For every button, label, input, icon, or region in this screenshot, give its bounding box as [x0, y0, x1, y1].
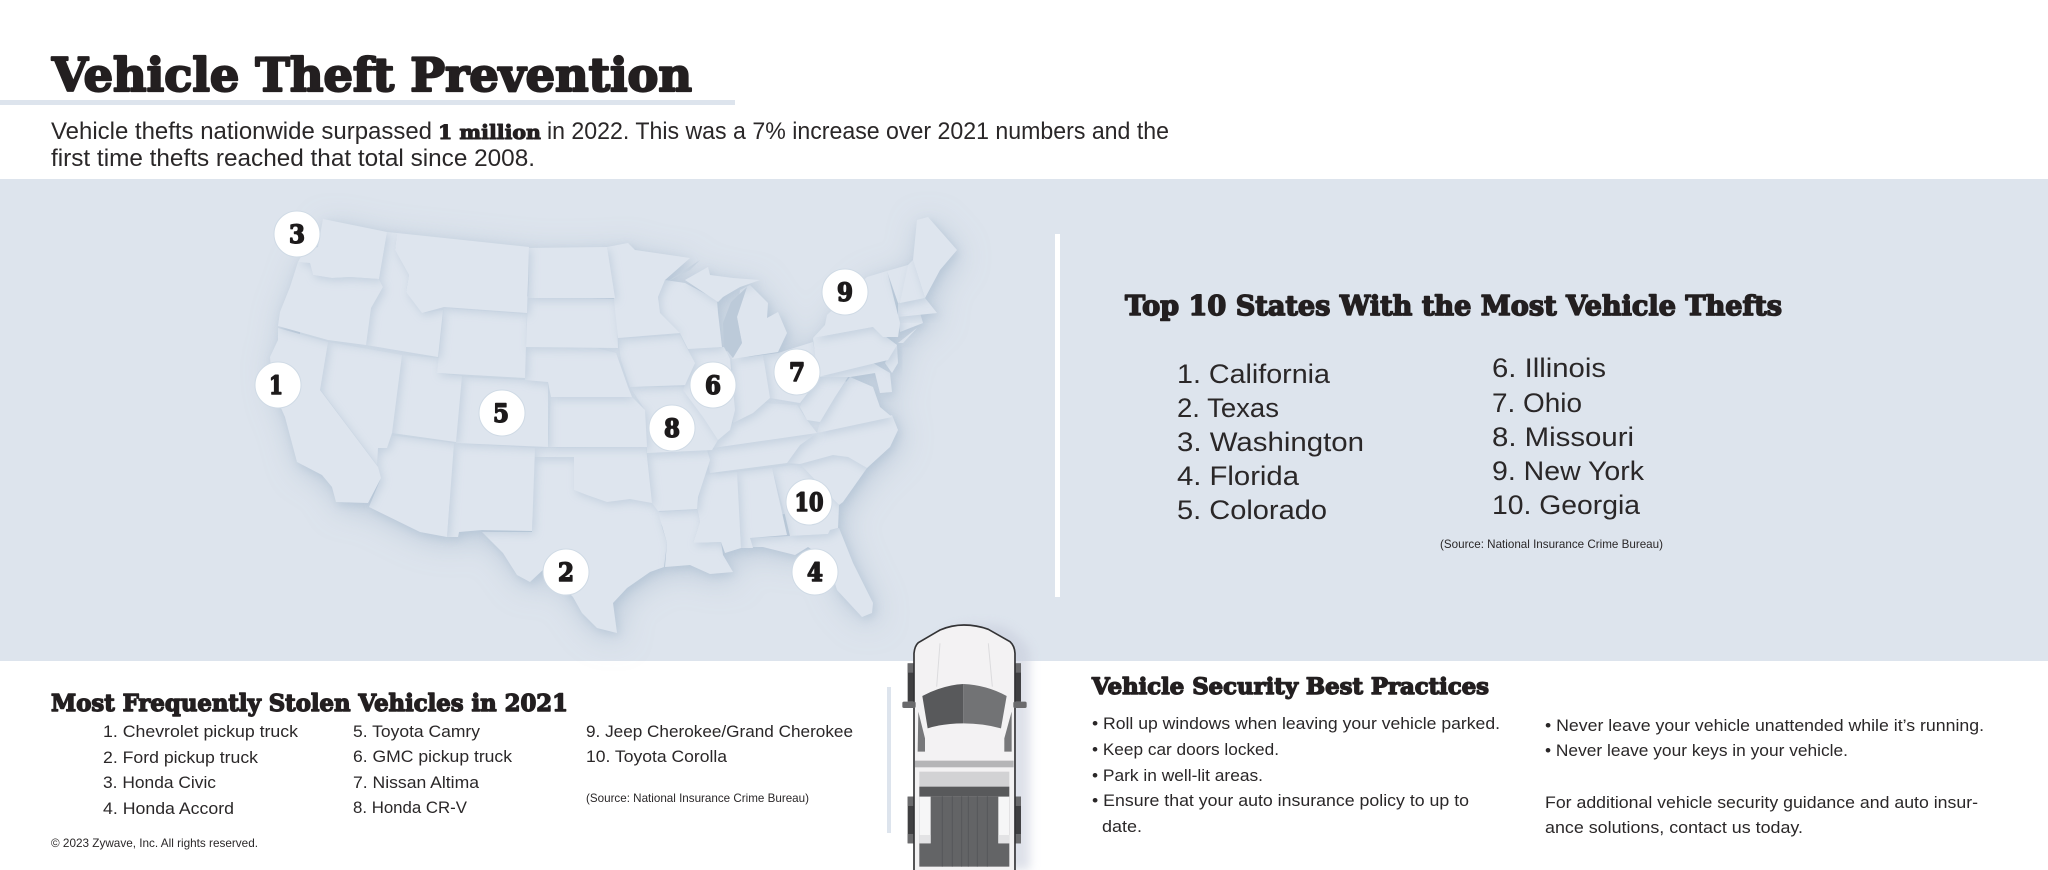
list: states 1 to 5: 4. Florida: [1177, 461, 1300, 491]
marker 8 Missouri: 8: [664, 414, 680, 443]
panel: map background band: [0, 179, 2048, 661]
list: best practices left: date.: [1102, 818, 1142, 836]
marker 2 Texas: 2: [558, 558, 574, 587]
windshield: [922, 684, 1007, 728]
copyright: © 2023 Zywave, Inc. All rights reserved.: [51, 836, 258, 850]
list: states 1 to 5: [1177, 359, 1364, 525]
list: best practices left: • Ensure that your auto insurance policy to up to: [1092, 792, 1469, 810]
intro text: 1 million: [438, 121, 541, 144]
mirrors: [902, 702, 1027, 708]
list: vehicles 5 to 8: 7. Nissan Altima: [353, 774, 480, 792]
hood lines: [937, 643, 992, 687]
list: states 6 to 10: 9. New York: [1492, 456, 1645, 486]
marker 3 Washington: 3: [289, 220, 305, 249]
list: best practices right: • Never leave your keys in your vehicle.: [1545, 742, 1848, 760]
list: states 6 to 10: 7. Ohio: [1492, 388, 1582, 418]
list: vehicles 1 to 4: 3. Honda Civic: [103, 774, 216, 792]
list: states 1 to 5: 2. Texas: [1177, 393, 1279, 423]
icon: pickup truck from above: [902, 625, 1030, 870]
list: states 1 to 5: 5. Colorado: [1177, 495, 1327, 525]
marker 2 Texas: [543, 549, 589, 595]
wheels: [908, 663, 1021, 843]
list: vehicles 1 to 4: 4. Honda Accord: [103, 800, 234, 818]
truck shadow: [925, 625, 1030, 870]
list: vehicles 1 to 4: [103, 723, 299, 818]
marker 5 Colorado: 5: [493, 399, 509, 428]
list: vehicles 1 to 4: 1. Chevrolet pickup truck: [103, 723, 299, 741]
truck bed: [919, 772, 1009, 867]
call to action text: ance solutions, contact us today.: [1545, 819, 1803, 837]
map markers: ranked state circles: [255, 211, 868, 595]
marker 10 Georgia: 10: [794, 488, 824, 517]
list: states 6 to 10: 10. Georgia: [1492, 490, 1641, 520]
side windows: [918, 712, 1012, 752]
source note: states: (Source: National Insurance Crime Bureau): [1440, 537, 1663, 551]
list: vehicles 1 to 4: 2. Ford pickup truck: [103, 749, 259, 767]
title: Vehicle Theft Prevention: [51, 48, 692, 102]
marker 6 Illinois: [690, 362, 736, 408]
list: best practices left: [1092, 715, 1500, 836]
list: states 6 to 10: 6. Illinois: [1492, 353, 1606, 383]
list: best practices right: • Never leave your vehicle unattended while it’s running.: [1545, 717, 1984, 735]
list: states 6 to 10: [1492, 353, 1645, 520]
marker 7 Ohio: 7: [789, 358, 805, 387]
marker 4 Florida: 4: [807, 558, 823, 587]
list: states 6 to 10: 8. Missouri: [1492, 422, 1634, 452]
intro text: first time thefts reached that total since 2008.: [51, 145, 535, 172]
list: states 1 to 5: 1. California: [1177, 359, 1331, 389]
intro text: in 2022. This was a 7% increase over 2021 numbers and the: [547, 118, 1169, 145]
marker 3 Washington: [274, 211, 320, 257]
heading: top 10 states: Top 10 States With the Most Vehicle Thefts: [1125, 291, 1782, 322]
title underline bar: [0, 100, 735, 105]
cab rear band: [915, 761, 1014, 767]
list: vehicles 9 and 10: [586, 723, 853, 766]
call to action text: For additional vehicle security guidance and auto insur-: [1545, 794, 1978, 812]
heading: most stolen vehicles: Most Frequently Stolen Vehicles in 2021: [51, 689, 568, 717]
list: best practices right: [1545, 717, 1984, 760]
marker 5 Colorado: [479, 390, 525, 436]
list: states 1 to 5: 3. Washington: [1177, 427, 1364, 457]
marker 1 California: [255, 362, 301, 408]
source note: vehicles: (Source: National Insurance Crime Bureau): [586, 791, 809, 805]
US map of states: [270, 217, 957, 633]
list: vehicles 5 to 8: 8. Honda CR-V: [353, 799, 467, 817]
vertical accent bar: [887, 687, 891, 833]
list: vehicles 5 to 8: [353, 723, 513, 817]
intro text: Vehicle thefts nationwide surpassed: [51, 118, 432, 145]
marker 8 Missouri: [649, 405, 695, 451]
panel divider: [1055, 234, 1060, 597]
marker 4 Florida: [792, 549, 838, 595]
list: best practices left: • Park in well-lit areas.: [1092, 767, 1263, 785]
list: vehicles 9 and 10: 10. Toyota Corolla: [586, 748, 728, 766]
call to action text: [1545, 794, 1978, 837]
marker 10 Georgia: [786, 479, 832, 525]
marker 9 New York: 9: [837, 278, 853, 307]
list: vehicles 9 and 10: 9. Jeep Cherokee/Grand Cherokee: [586, 723, 853, 741]
intro text: [51, 118, 1169, 172]
list: best practices left: • Keep car doors locked.: [1092, 741, 1279, 759]
heading: security best practices: Vehicle Security Best Practices: [1091, 674, 1489, 700]
marker 1 California: 1: [269, 371, 283, 400]
list: vehicles 5 to 8: 5. Toyota Camry: [353, 723, 481, 741]
list: best practices left: • Roll up windows when leaving your vehicle parked.: [1092, 715, 1500, 733]
marker 7 Ohio: [774, 349, 820, 395]
marker 6 Illinois: 6: [705, 371, 721, 400]
list: vehicles 5 to 8: 6. GMC pickup truck: [353, 748, 513, 766]
truck body: [914, 625, 1015, 870]
marker 9 New York: [822, 269, 868, 315]
